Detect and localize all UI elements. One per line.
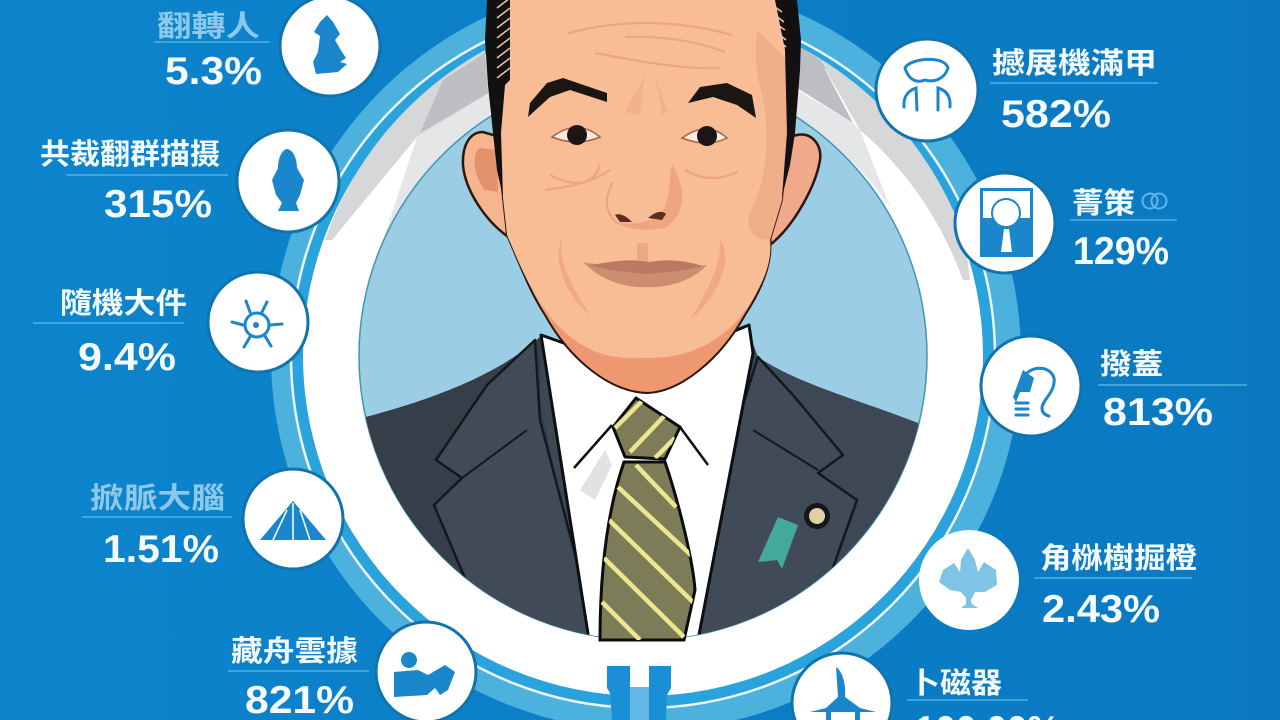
portrait: nostrils — [615, 212, 666, 222]
item: bottom left 821% — [228, 622, 476, 720]
portrait: eyebrows — [528, 78, 607, 117]
item: left 1.51%: 1.51% — [103, 528, 219, 571]
icon: figure in outline — [876, 39, 978, 141]
item: right 129%: 129% — [1073, 230, 1169, 273]
portrait: ears — [463, 132, 820, 245]
icon: pyramid — [243, 469, 343, 569]
item: bottom right clipped value: 卜磁器 — [909, 667, 1002, 700]
icon: cell with arrows — [208, 272, 308, 372]
portrait: mouth — [583, 262, 707, 287]
item: right 2.43% — [919, 530, 1197, 631]
item: right 813%: 撥蓋 — [1100, 348, 1163, 381]
item: left 9.4%: 隨機大件 — [60, 287, 187, 320]
portrait circle — [340, 0, 950, 660]
icon: figure with crown — [280, 0, 380, 96]
portrait: teal ribbon — [758, 517, 798, 569]
item: top right 582%: 撼展機滿甲 — [992, 47, 1157, 80]
item: bottom right clipped value — [792, 653, 1060, 720]
icon: ear curve — [981, 336, 1081, 436]
item: right 129% — [955, 173, 1177, 273]
central ring — [271, 0, 1021, 720]
item: top left 5.3%: 5.3% — [165, 50, 262, 93]
item: left 9.4%: 9.4% — [78, 336, 176, 379]
ring: left grey highlights — [325, 50, 490, 240]
item: left 315%: 315% — [104, 183, 212, 226]
item: right 813%: 813% — [1103, 391, 1213, 434]
item: right 129%: 菁策 — [1072, 187, 1135, 220]
item: right 2.43%: 2.43% — [1042, 588, 1160, 631]
item: right 813% — [981, 336, 1247, 436]
portrait: eyes — [552, 128, 600, 142]
portrait: face shading — [748, 30, 787, 240]
item: top left 5.3% — [154, 0, 380, 96]
icon: framed portrait — [955, 173, 1055, 273]
portrait: head — [485, 0, 801, 393]
portrait: tie — [600, 398, 695, 640]
pillars at bottom — [607, 666, 671, 720]
item: bottom left 821%: 藏舟雲據 — [231, 635, 358, 668]
icon: windmill house — [792, 653, 892, 720]
ring: right grey highlights — [797, 47, 970, 280]
item: top right 582% — [876, 39, 1158, 141]
portrait: suit and shirt — [366, 324, 918, 637]
icon: tree — [919, 530, 1019, 630]
item: right 2.43%: 角椕樹掘橙 — [1040, 542, 1197, 575]
portrait: hair — [485, 0, 510, 197]
item: top right 582%: 582% — [1001, 93, 1111, 136]
portrait: lapel pin — [804, 503, 830, 529]
portrait: wrinkles — [545, 23, 738, 224]
item: left 315% — [40, 130, 339, 232]
icon: silhouette — [237, 130, 339, 232]
item: left 1.51% — [82, 469, 343, 571]
item: left 9.4% — [33, 272, 308, 379]
item: top left 5.3%: 翻轉人 — [157, 10, 260, 43]
item: left 315%: 共裁翻群描摄 — [40, 138, 220, 171]
item: left 1.51%: 掀脈大腦 — [90, 482, 225, 515]
icon: small circle glyph — [1142, 194, 1166, 208]
icon: person with map — [376, 622, 476, 720]
